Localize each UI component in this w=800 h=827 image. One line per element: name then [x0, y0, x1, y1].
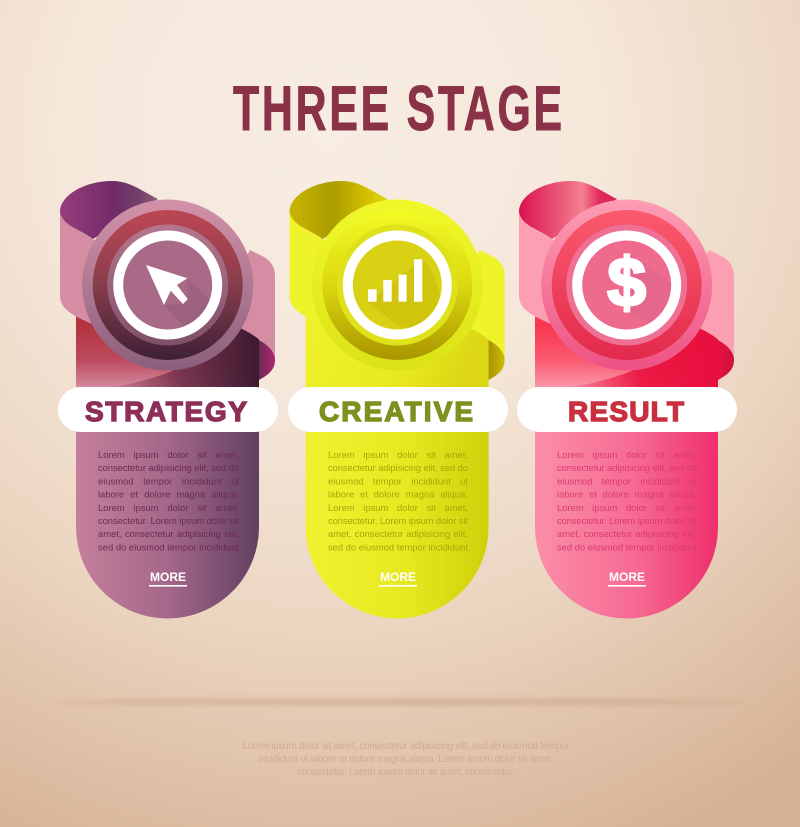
body text: Lorem ipsum dolor sit amet, — [328, 449, 468, 460]
body text: eiusmod tempor incididunt ut — [98, 475, 239, 486]
body text: Lorem ipsum dolor sit amet, — [557, 502, 697, 513]
ribbon band left — [519, 212, 584, 340]
right ribbon fold — [718, 340, 734, 380]
body text: eiusmod tempor incididunt ut — [557, 475, 697, 486]
body upper shade — [105, 325, 259, 388]
body upper shade — [564, 325, 718, 388]
footer text: Lorem ipsum dolor sit amet, consectetur adipisicing elit, sed do eiusmod tempor — [242, 741, 570, 752]
body text: labore et dolore magna aliqua. — [98, 489, 239, 500]
body text: consectetur adipisicing elit, sed do — [557, 462, 697, 473]
label pill — [517, 387, 737, 432]
body text: consectetur. Lorem ipsum dolor sit — [98, 515, 239, 526]
body text: consectetur adipisicing elit, sed do — [98, 462, 239, 473]
body text: Lorem ipsum dolor sit amet, — [328, 502, 468, 513]
label: RESULT — [568, 396, 684, 427]
body text: amet, consectetur adipisicing elit, — [328, 528, 468, 539]
body text — [557, 449, 697, 552]
top ribbon fold — [519, 181, 617, 239]
body text: consectetur. Lorem ipsum dolor sit — [557, 515, 697, 526]
ribbon band right — [220, 250, 275, 358]
body text: labore et dolore magna aliqua. — [557, 489, 697, 500]
label pill — [58, 387, 278, 432]
top ribbon fold — [290, 181, 388, 239]
circle badge — [541, 200, 712, 370]
body upper — [76, 310, 259, 388]
body text: eiusmod tempor incididunt ut — [328, 475, 468, 486]
more link: MORE — [380, 570, 416, 584]
body text: Lorem ipsum dolor sit amet, — [557, 449, 697, 460]
panel: strategy — [58, 181, 278, 618]
ribbon band right — [679, 250, 734, 358]
panel: result — [517, 181, 737, 618]
footer text: incididunt ut labore et dolore magna aliqua. Lorem ipsum dolor sit amet, — [259, 754, 553, 765]
icon: dollar sign: $ — [608, 244, 646, 321]
body lower — [535, 430, 718, 618]
body text: sed do eiusmod tempor incididunt — [557, 541, 697, 552]
body upper — [535, 310, 718, 388]
body lower — [76, 430, 259, 618]
body text — [328, 449, 468, 552]
footer text — [242, 741, 570, 778]
ribbon band right — [450, 250, 505, 358]
body lower — [306, 430, 489, 618]
ribbon band left — [290, 212, 355, 340]
panel: creative — [288, 181, 508, 618]
body text: Lorem ipsum dolor sit amet, — [98, 449, 239, 460]
floor shadow — [55, 699, 745, 705]
icon: bar chart — [368, 259, 443, 328]
body upper — [306, 310, 489, 388]
icon: dollar sign — [606, 253, 670, 322]
body text: labore et dolore magna aliqua. — [328, 489, 468, 500]
right ribbon fold — [259, 340, 275, 380]
top ribbon fold — [60, 181, 158, 239]
icon: cursor arrow — [146, 265, 209, 326]
circle badge — [312, 200, 483, 370]
body text: consectetur. Lorem ipsum dolor sit — [328, 515, 468, 526]
body text: Lorem ipsum dolor sit amet, — [98, 502, 239, 513]
body text: amet, consectetur adipisicing elit, — [557, 528, 697, 539]
right ribbon fold — [489, 340, 505, 380]
footer text: consectetur. Lorem ipsum dolor sit amet, consectetur. — [297, 767, 515, 778]
ribbon band left — [60, 212, 125, 340]
more link: MORE — [609, 570, 645, 584]
more link: MORE — [150, 570, 186, 584]
body text: amet, consectetur adipisicing elit, — [98, 528, 239, 539]
body text — [98, 449, 239, 552]
body text: sed do eiusmod tempor incididunt — [98, 541, 239, 552]
title: THREE STAGE — [233, 74, 562, 144]
body text: consectetur adipisicing elit, sed do — [328, 462, 468, 473]
circle badge — [82, 200, 253, 370]
label pill — [288, 387, 508, 432]
label: STRATEGY — [85, 396, 247, 427]
label: CREATIVE — [319, 396, 473, 427]
body text: sed do eiusmod tempor incididunt — [328, 541, 468, 552]
